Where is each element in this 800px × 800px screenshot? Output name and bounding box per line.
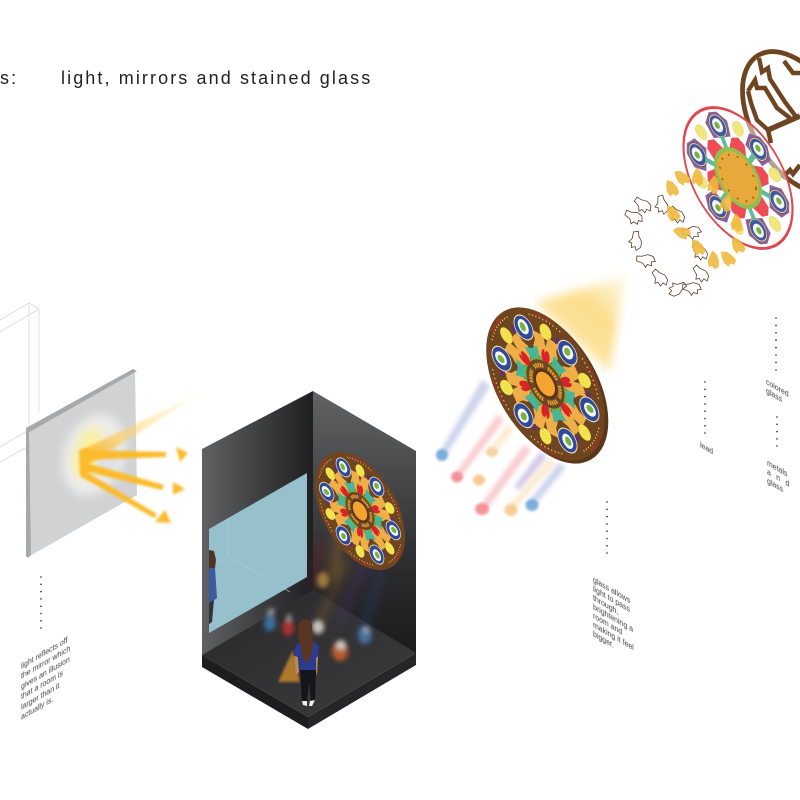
caption: mirror: actually is.: [21, 694, 53, 722]
caption: glass: through,: [593, 593, 618, 617]
caption: glass: room and: [593, 611, 622, 637]
title: s:: [0, 68, 18, 88]
exploded layer: lead frame: [742, 28, 800, 216]
caption: mirror: light reflects off: [21, 635, 68, 671]
caption: metals and glass: metals: [767, 458, 787, 479]
caption: glass: glass allows: [593, 575, 630, 606]
caption: mirror: larger than it: [21, 680, 60, 712]
caption: glass: bigger.: [593, 629, 614, 650]
caption: mirror: the mirror which: [21, 644, 70, 681]
title: light, mirrors and stained glass: [61, 68, 372, 88]
right wall: [313, 391, 416, 655]
caption: metals and glass: [767, 458, 789, 498]
loose glass pieces: outlines: [623, 193, 710, 298]
caption: glass: making it feel: [593, 620, 634, 653]
caption: glass: brightening a: [593, 602, 633, 634]
reflected light beams: [79, 389, 208, 523]
room light beams: [312, 510, 385, 640]
caption: glass: [593, 575, 634, 662]
wireframe room outline: [0, 303, 39, 462]
dotted leader: metals and glass: [776, 416, 778, 447]
caption: mirror: that a room is: [21, 668, 63, 702]
room light blobs: [264, 572, 372, 661]
coloured light blobs: [436, 447, 538, 516]
caption: coloured glass: glass: [766, 386, 782, 404]
caption: mirror: gives an illusion: [21, 654, 70, 691]
caption: mirror: [21, 634, 70, 722]
floor light triangle: [278, 650, 300, 682]
reflected person: [209, 550, 217, 624]
isometric room: [202, 391, 416, 729]
caption: glass: light to pass: [593, 584, 630, 614]
arrowheads: [176, 447, 188, 462]
person: [293, 619, 319, 706]
incoming sunlight: [535, 277, 624, 372]
caption: metals and glass: a n d: [767, 467, 789, 489]
centre window light rays: [436, 277, 624, 516]
central stained glass disc: [480, 264, 611, 504]
exploded layer: coloured glass: [684, 77, 792, 279]
caption: coloured glass: colored: [766, 377, 789, 399]
dotted leader: mirror: [40, 576, 42, 629]
dotted leader: glass: [606, 501, 608, 554]
caption: lead: lead: [700, 440, 713, 457]
mirror on wall: [209, 473, 307, 633]
room rose window: [310, 418, 410, 604]
coloured rays: [440, 380, 566, 510]
floor slab: [202, 655, 308, 729]
dotted leader: lead: [704, 381, 706, 434]
loose glass pieces: yellow: [664, 166, 747, 270]
caption: metals and glass: glass: [767, 476, 783, 494]
mirror panel: [26, 369, 137, 558]
dotted leader: coloured glass: [775, 317, 777, 371]
mirror glow: [51, 405, 137, 505]
left wall: [202, 391, 313, 658]
